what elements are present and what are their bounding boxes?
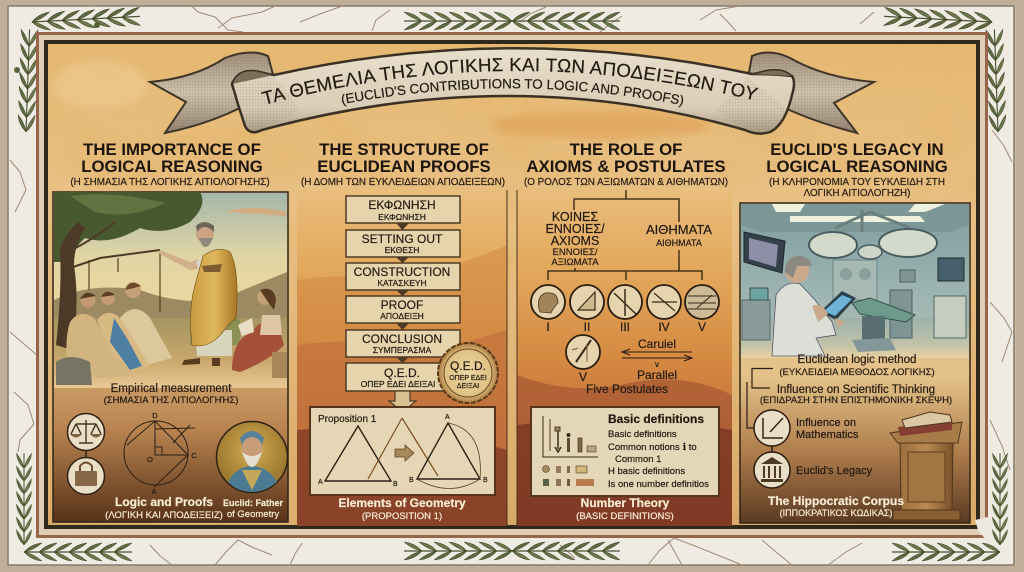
- caption: Euclid father of geometry: of Geometry: [227, 509, 279, 520]
- label: five postulates: Five Postulates: [586, 382, 668, 396]
- icon: postulate II: II: [584, 320, 590, 334]
- step: enunciation: ΕΚΦΩΝΗΣΗ: [378, 212, 426, 222]
- label: influence on mathematics: Mathematics: [796, 429, 859, 441]
- label: common notions: ΕΝΝΟΙΕΣ/: [545, 222, 605, 236]
- medallion: portrait of Euclid: [216, 422, 288, 492]
- icon: postulate I: [531, 285, 565, 334]
- caption: elements of geometry: [338, 496, 466, 522]
- diagram: circle geometry: [124, 411, 197, 496]
- arrow: down to proposition: [389, 391, 416, 412]
- heading: column 3: AXIOMS & POSTULATES: [526, 157, 726, 176]
- caption: empirical measurement: [104, 383, 238, 406]
- caption: Euclid father of geometry: [223, 498, 283, 520]
- heading: column 3: [524, 140, 728, 188]
- laurel: bottom right corner: [892, 453, 1008, 561]
- definitions text: Basic definitions: [608, 429, 677, 440]
- label: common notions: [545, 210, 605, 268]
- panel: proposition 1: B: [393, 481, 398, 488]
- caption: Euclidean logic method: Euclidean logic method: [798, 354, 916, 366]
- caption: number theory: (BASIC DEFINITIONS): [576, 511, 674, 522]
- illustration: lectern with books: [890, 412, 962, 520]
- banner title text: ΤΑ ΘΕΜΕΛΙΑ ΤΗΣ ΛΟΓΙΚΗΣ ΚΑΙ ΤΩΝ ΑΠΟΔΕΙΞΕΩΝ ΤΟΥ: [261, 58, 758, 104]
- column 3 background: [517, 190, 732, 526]
- banner subtitle text: (EUCLID'S CONTRIBUTIONS TO LOGIC AND PROOFS): [342, 78, 684, 108]
- banner right tail: [748, 52, 874, 133]
- definitions text: Is one number definitios: [608, 479, 709, 490]
- icon: postulate V: V: [698, 320, 706, 334]
- definitions text: Common notions ℹ to: [608, 442, 697, 453]
- panel: proposition 1: B: [483, 477, 488, 484]
- heading: column 4: (Η ΚΛΗΡΟΝΟΜΙΑ ΤΟΥ ΕΥΚΛΕΙΔΗ ΣΤΗ: [769, 177, 945, 188]
- icon: scales of justice: [68, 414, 104, 450]
- label: influence on mathematics: [796, 417, 859, 441]
- title banner: [146, 47, 878, 135]
- connector lines: [747, 368, 773, 428]
- caption: influence on scientific thinking: Influence on Scientific Thinking: [777, 384, 935, 396]
- figure: Euclid teacher: [158, 222, 237, 366]
- step: Q.E.D.: ΟΠΕΡ ΕΔΕΙ ΔΕΙΞΑΙ: [361, 379, 435, 389]
- surgical lights: [809, 229, 937, 259]
- heading: column 4: EUCLID'S LEGACY IN: [770, 140, 944, 159]
- step: setting out: ΕΚΘΕΣΗ: [385, 245, 419, 255]
- caption: influence on scientific thinking: (ΕΠΙΔΡΑΣΗ ΣΤΗΝ ΕΠΙΣΤΗΜΟΝΙΚΗ ΣΚΕΨΗ): [760, 395, 952, 406]
- step: setting out: [346, 230, 460, 263]
- caption: Hippocratic Corpus: [768, 494, 904, 518]
- caption: influence on scientific thinking: [760, 384, 952, 406]
- caption: Euclidean logic method: [779, 354, 935, 378]
- parallel lines diagram: v: [655, 360, 659, 369]
- caption: Euclid father of geometry: Euclid: Father: [223, 498, 283, 508]
- step: enunciation: ΕΚΦΩΝΗΣΗ: [368, 198, 436, 212]
- diagram: circle geometry: D: [152, 411, 158, 420]
- laurel: top left corner: [14, 7, 140, 132]
- step: conclusion: ΣΥΜΠΕΡΑΣΜΑ: [373, 345, 432, 355]
- step: setting out: SETTING OUT: [362, 232, 443, 246]
- icon: postulate I: I: [546, 320, 550, 334]
- icon: temple: [754, 446, 790, 488]
- heading: column 1: LOGICAL REASONING: [81, 157, 263, 176]
- seal: Q.E.D.: ΔΕΙΞΑΙ: [457, 383, 479, 390]
- icon: postulate III: [608, 285, 642, 334]
- panel: proposition 1: B: [409, 477, 414, 484]
- parallel lines diagram: [622, 337, 692, 382]
- label: common notions: ΚΟΙΝΕΣ: [552, 210, 598, 224]
- heading: column 3: THE ROLE OF: [570, 140, 682, 159]
- seal: Q.E.D.: Q.E.D.: [450, 359, 486, 373]
- icon: postulate IV: [647, 285, 681, 334]
- column 2 background: [297, 190, 507, 526]
- icon: mathematics axes: [754, 410, 790, 446]
- icon: postulate V: [685, 285, 719, 334]
- icon: postulate IV: IV: [658, 320, 670, 334]
- parallel lines diagram: Parallel: [637, 368, 677, 382]
- step: construction: [346, 263, 460, 296]
- caption: elements of geometry: (PROPOSITION 1): [362, 511, 442, 522]
- heading: column 2: [301, 140, 505, 188]
- panel: proposition 1: A: [318, 479, 323, 486]
- banner main ribbon: [232, 48, 794, 134]
- caption: logic and proofs: [105, 495, 223, 521]
- icon: postulate V second: [566, 335, 600, 384]
- heading: column 4: [766, 140, 948, 199]
- step: proof: PROOF: [381, 298, 423, 312]
- step: proof: [346, 296, 460, 330]
- caption: Hippocratic Corpus: The Hippocratic Corpus: [768, 494, 904, 508]
- panel: proposition 1: Proposition 1: [318, 414, 377, 425]
- illustration: modern operating room: [741, 204, 969, 358]
- icon: postulate V second: V: [579, 370, 587, 384]
- panel: proposition 1: [310, 407, 495, 495]
- heading: column 1: (Η ΣΗΜΑΣΙΑ ΤΗΣ ΛΟΓΙΚΗΣ ΑΙΤΙΟΛΟΓΗΣΗΣ): [70, 177, 270, 188]
- definitions text: Basic definitions: [608, 412, 704, 426]
- caption: number theory: Number Theory: [581, 496, 670, 510]
- step: construction: ΚΑΤΑΣΚΕΥΗ: [377, 278, 427, 288]
- illustration: teacher and students under olive tree: [54, 192, 287, 388]
- seal: Q.E.D.: [438, 343, 498, 403]
- caption: empirical measurement: (ΣΗΜΑΣΙΑ ΤΗΣ ΛΙΤΙΟΛΟΓΗΉΣ): [104, 395, 238, 406]
- step: conclusion: [346, 330, 460, 363]
- diagram: circle geometry: C: [191, 451, 197, 460]
- laurel: bottom left corner: [16, 453, 132, 561]
- step: conclusion: CONCLUSION: [362, 332, 442, 346]
- laurel: top centre: [404, 12, 620, 30]
- step: proof: ΑΠΟΔΕΙΞΗ: [380, 311, 424, 321]
- caption: empirical measurement: Empirical measurement: [111, 383, 232, 395]
- step: Q.E.D.: Q.E.D.: [384, 366, 420, 380]
- panel: importance of logical reasoning: [53, 192, 288, 522]
- step: enunciation: [346, 196, 460, 230]
- seal: Q.E.D.: ΟΠΕΡ ΕΔΕΙ: [449, 375, 487, 382]
- caption: logic and proofs: (ΛΟΓΙΚΗ ΚΑΙ ΑΠΟΔΕΙΞΕΙΖ): [105, 510, 223, 521]
- label: common notions: ΕΝΝΟΙΕΣ/: [553, 247, 598, 258]
- heading: column 4: ΛΟΓΙΚΗ ΑΙΤΙΟΛΟΓΗΖΗ): [804, 188, 910, 199]
- caption: number theory: [576, 496, 674, 522]
- caption: Euclidean logic method: (ΕΥΚΛΕΙΔΕΙΑ ΜΕΘΟΔΟΣ ΛΟΓΙΚΗΣ): [779, 367, 935, 378]
- parallel lines diagram: Caruiel: [638, 337, 676, 351]
- label: postulates: [646, 222, 712, 248]
- figures: seated students: [56, 282, 172, 385]
- operating table: [852, 298, 915, 352]
- step: construction: CONSTRUCTION: [354, 265, 450, 279]
- definitions text: Common 1: [615, 454, 661, 465]
- heading: column 1: [70, 140, 270, 188]
- definitions text: [608, 412, 709, 490]
- banner left tail: [150, 52, 274, 133]
- label: influence on mathematics: Influence on: [796, 417, 856, 429]
- heading: column 2: EUCLIDEAN PROOFS: [317, 157, 491, 176]
- icon: postulate III: III: [620, 320, 630, 334]
- figure: doctor with tablet: [772, 256, 856, 356]
- panel: Euclid's legacy: [740, 203, 970, 523]
- heading: column 2: THE STRUCTURE OF: [319, 140, 489, 159]
- heading: column 3: (Ο ΡΟΛΟΣ ΤΩΝ ΑΞΙΩΜΑΤΩΝ & ΑΙΘΗΜΑΤΩΝ): [524, 177, 728, 188]
- caption: logic and proofs: Logic and Proofs: [115, 495, 213, 509]
- diagram: circle geometry: O: [147, 455, 153, 464]
- label: postulates: ΑΙΘΗΜΑΤΑ: [646, 222, 712, 237]
- icon: padlock: [68, 450, 104, 494]
- diagram: circle geometry: A: [151, 487, 157, 496]
- icon: postulate II: [570, 285, 604, 334]
- caption: elements of geometry: Elements of Geometry: [338, 496, 466, 510]
- tree connectors: [548, 190, 702, 280]
- laurel: top right corner: [884, 7, 1007, 132]
- diagram: axioms and postulates: [531, 190, 719, 522]
- label: postulates: ΑΙΘΗΜΑΤΑ: [656, 238, 702, 248]
- heading: column 2: (Η ΔΟΜΗ ΤΩΝ ΕΥΚΛΕΙΔΕΙΩΝ ΑΠΟΔΕΙΞΕΩΝ): [301, 177, 505, 188]
- flow chart: structure of proofs: [310, 196, 498, 522]
- panel: basic definitions: [531, 407, 719, 496]
- definitions text: H basic definitions: [608, 466, 685, 477]
- label: Euclid's legacy: Euclid's Legacy: [796, 465, 873, 477]
- label: common notions: AXIOMS: [551, 234, 599, 248]
- laurel: bottom centre: [404, 542, 620, 560]
- caption: Hippocratic Corpus: (ΙΠΠΟΚΡΑΤΙΚΟΣ ΚΩΔΙΚΑΣ): [780, 508, 892, 518]
- heading: column 1: THE IMPORTANCE OF: [83, 140, 261, 159]
- heading: column 4: LOGICAL REASONING: [766, 157, 948, 176]
- figure: seated reader: [232, 289, 287, 378]
- panel: proposition 1: A: [445, 414, 450, 421]
- mini bar chart: [542, 416, 598, 486]
- step: Q.E.D.: [346, 363, 460, 391]
- label: common notions: ΑΞΙΩΜΑΤΑ: [551, 257, 599, 268]
